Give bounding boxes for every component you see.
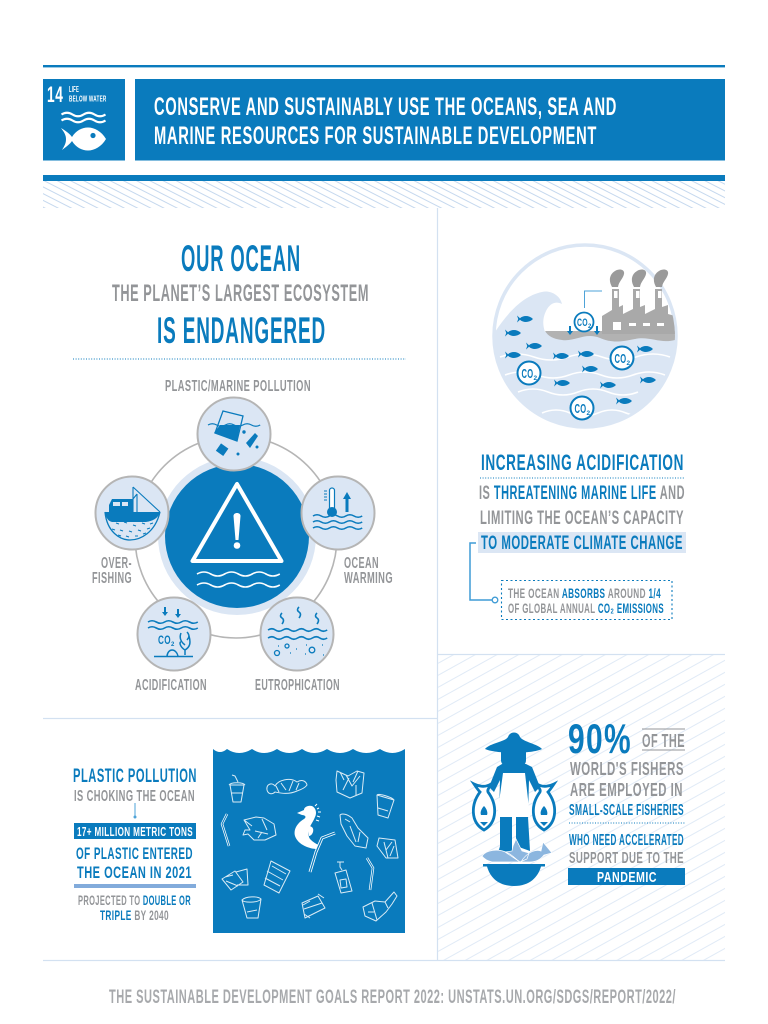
panel dividers: [43, 208, 725, 960]
pandemic label: [568, 868, 685, 886]
CO2 connector and arrows: [567, 291, 602, 335]
icon: overfishing: [96, 476, 168, 550]
fishers text: WORLD'S FISHERS: [570, 758, 684, 779]
panel: plastic pollution text: THE OCEAN IN 2021: [77, 864, 192, 882]
icon: acidification: [138, 598, 210, 670]
plastic debris: [222, 771, 398, 921]
header band with hatching: [43, 175, 725, 208]
pandemic label: PANDEMIC: [597, 870, 657, 886]
panel: plastic pollution text: [73, 766, 197, 923]
label: acidification: ACIDIFICATION: [135, 677, 207, 694]
label: ocean warming: OCEAN: [344, 555, 379, 572]
of the: [642, 729, 685, 751]
icon: plastic pollution: [198, 398, 270, 470]
icon: fisher with fish: [473, 732, 555, 886]
heading: our ocean: OUR OCEAN: [181, 238, 301, 279]
label: ocean warming: [344, 555, 393, 587]
label: plastic pollution: PLASTIC/MARINE POLLUTION: [165, 378, 311, 395]
CO2 bubbles: CO: [574, 401, 586, 416]
top rule: [43, 65, 725, 67]
CO2 bubbles: 2: [586, 410, 590, 417]
panel: plastic pollution text: IS CHOKING THE OCEAN: [74, 788, 195, 805]
illustration: plastic in the sea: [213, 749, 405, 933]
CO2 bubbles: CO: [522, 366, 534, 381]
icon: waves and fish: [61, 113, 106, 151]
illustration: ocean absorbing CO2: [490, 245, 680, 440]
CO2 bubbles: CO: [577, 317, 588, 329]
panel: plastic pollution text: PROJECTED TO DOUBLE OR: [78, 892, 191, 908]
fishers text: SUPPORT DUE TO THE: [569, 850, 684, 867]
title banner: [135, 79, 725, 160]
callout: CO2 absorption: OF GLOBAL ANNUAL CO₂ EMISSIONS: [508, 600, 664, 616]
heading: our ocean: [112, 238, 369, 351]
smoke: [610, 270, 668, 287]
icon: acidification: CO: [158, 633, 171, 647]
bent straw: [310, 833, 335, 872]
arrow: [134, 803, 136, 818]
icon: acidification: 2: [171, 642, 175, 648]
threats diagram: [92, 378, 393, 694]
label: overfishing: FISHING: [92, 570, 132, 587]
CO2 bubbles: 2: [626, 360, 630, 367]
fishers text: ARE EMPLOYED IN: [570, 779, 683, 800]
label: eutrophication: EUTROPHICATION: [255, 677, 340, 694]
fish school: [505, 316, 656, 404]
white sea currents: [500, 354, 670, 416]
panel: plastic pollution text: PLASTIC POLLUTION: [73, 766, 197, 787]
CO2 bubbles: CO: [614, 351, 626, 366]
SDG 14 tile: [43, 79, 125, 160]
acidification text: IS THREATENING MARINE LIFE AND: [479, 483, 685, 504]
acidification text: [478, 483, 686, 554]
of the: OF THE: [642, 731, 685, 751]
bracket connector: [470, 543, 498, 603]
heading: our ocean: THE PLANET’S LARGEST ECOSYSTEM: [112, 280, 369, 307]
heading: our ocean: IS ENDANGERED: [157, 310, 326, 351]
icon: warning triangle: [192, 484, 282, 587]
panel: fishers: [438, 655, 725, 960]
fishers text: [569, 758, 685, 867]
goal number: 14: [47, 82, 64, 107]
CO2 bubbles: [518, 312, 634, 420]
statistic: 90%: 90%: [568, 715, 632, 762]
17+ million label: [74, 823, 196, 839]
CO2 bubbles: 2: [534, 375, 538, 382]
goal name: LIFE: [69, 84, 79, 94]
icon: ocean warming: [302, 476, 374, 550]
panel: plastic pollution text: TRIPLE BY 2040: [100, 907, 169, 923]
17+ million label: 17+ MILLION METRIC TONS: [77, 824, 193, 839]
goal name: [69, 84, 106, 104]
label: ocean warming: WARMING: [344, 570, 393, 587]
callout: CO2 absorption: [502, 580, 672, 620]
goal name: BELOW WATER: [69, 94, 106, 104]
icon: seahorse: [295, 804, 321, 849]
CO2 bubbles: 2: [588, 324, 592, 330]
icon: eutrophication: [260, 598, 334, 670]
label: overfishing: [92, 555, 132, 587]
callout: CO2 absorption: THE OCEAN ABSORBS AROUND 1/4: [508, 585, 661, 601]
label: overfishing: OVER-: [101, 555, 132, 572]
panel: plastic pollution text: OF PLASTIC ENTERED: [76, 845, 193, 863]
